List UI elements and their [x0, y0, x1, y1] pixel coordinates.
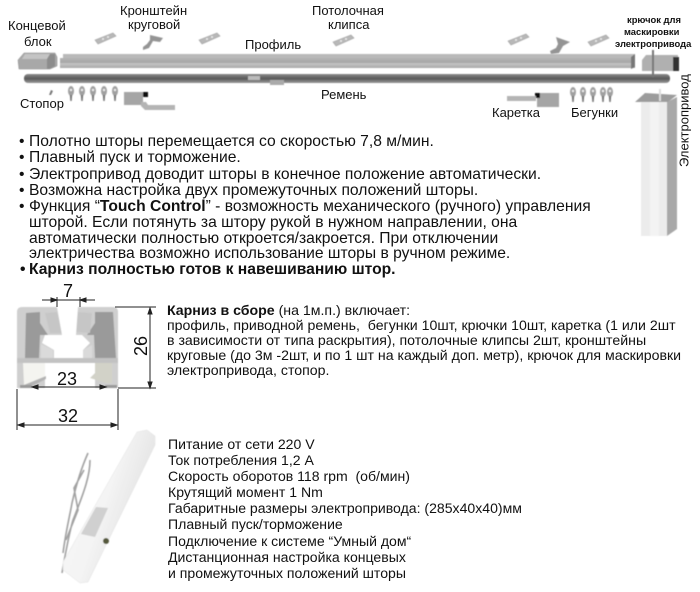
- feature list: Плавный пуск и торможение.: [29, 149, 241, 166]
- assembly kit text: [167, 302, 681, 378]
- feature list: шторой. Если потянуть за штору рукой в нужном направлении, она: [29, 214, 517, 231]
- stopper: [49, 90, 53, 95]
- assembly kit text: электропривода, стопор.: [167, 362, 329, 378]
- motor specifications: Габаритные размеры электропривода: (285x40x40)мм: [168, 500, 522, 516]
- assembly kit text: профиль, приводной ремень, бегунки 10шт, крючки 10шт, каретка (1 или 2шт: [167, 317, 676, 333]
- label: carriage: Каретка: [492, 105, 541, 120]
- runners left: [68, 86, 118, 101]
- belt: [24, 74, 670, 85]
- feature list: [19, 133, 591, 278]
- label: hook: крючок для: [627, 14, 681, 25]
- end block left: [18, 53, 57, 69]
- dimension: 23: 23: [57, 369, 77, 389]
- label: stopper: Стопор: [20, 96, 64, 111]
- label: motor: Электропривод: [676, 74, 692, 167]
- assembly kit text: Карниз в сборе (на 1м.п.) включает:: [167, 302, 410, 318]
- carriage left: [124, 92, 175, 110]
- end block right with hook: [642, 50, 679, 77]
- motor specifications: и промежуточных положений шторы: [168, 565, 406, 581]
- label: runners: Бегунки: [571, 105, 618, 120]
- label: hook: маскировки: [624, 26, 680, 37]
- assembly kit text: круговые (до 3м -2шт, и по 1 шт на каждый доп. метр), крючок для маскировки: [167, 347, 681, 363]
- motor cover: [635, 89, 677, 236]
- motor specifications: Крутящий момент 1 Nm: [168, 484, 323, 500]
- assembly kit text: в зависимости от типа раскрытия), потолочные клипсы 2шт, кронштейны: [167, 332, 646, 348]
- motor specifications: [168, 436, 522, 581]
- label: hook: [615, 14, 692, 49]
- motor specifications: Питание от сети 220 V: [168, 436, 315, 452]
- motor specifications: Скорость оборотов 118 rpm (об/мин): [168, 468, 410, 484]
- ceiling clips: [95, 33, 609, 46]
- motor specifications: Дистанционная настройка концевых: [168, 549, 406, 565]
- feature list: •: [19, 182, 24, 199]
- feature list: Полотно шторы перемещается со скоростью 7,8 м/мин.: [29, 133, 434, 150]
- runners right: [570, 87, 613, 102]
- dimension: 7: 7: [63, 281, 73, 301]
- feature list: •: [19, 133, 24, 150]
- feature list: •: [19, 166, 24, 183]
- feature list: Электропривод доводит шторы в конечное положение автоматически.: [29, 166, 541, 183]
- feature list: •: [19, 149, 24, 166]
- rail kit diagram: клипса: [328, 17, 370, 32]
- dimension: 32: 32: [58, 406, 78, 426]
- round bracket right: [550, 37, 570, 54]
- motor specifications: Ток потребления 1,2 А: [168, 452, 314, 468]
- label: end block: Концевой: [8, 18, 66, 33]
- feature list: •: [19, 198, 24, 215]
- rail kit diagram: блок: [24, 34, 52, 49]
- rail kit diagram: круговой: [128, 17, 180, 32]
- feature list: автоматически полностью откроется/закроется. При отключении: [29, 230, 498, 247]
- label: hook: электропривода: [615, 38, 692, 49]
- motor body: [63, 430, 155, 583]
- feature list: •: [20, 261, 25, 278]
- button: [103, 538, 109, 544]
- motor specifications: Плавный пуск/торможение: [168, 516, 343, 532]
- feature list: Функция “Touch Control” - возможность механического (ручного) управления: [29, 198, 591, 215]
- dimension lines: [17, 297, 156, 430]
- label: round bracket: Кронштейн: [120, 3, 187, 18]
- rail kit diagram: [8, 3, 692, 236]
- profile rail: [60, 54, 635, 69]
- dimension: 26: 26: [131, 336, 151, 356]
- tubular motor photo: [62, 430, 155, 583]
- motor specifications: Подключение к системе “Умный дом“: [168, 533, 412, 549]
- power cable: [62, 453, 90, 573]
- feature list: электричества возможно использование шторы в ручном режиме.: [29, 245, 510, 262]
- label: ceiling clip: Потолочная: [312, 3, 384, 18]
- round bracket left: [143, 35, 163, 50]
- label: belt: Ремень: [321, 87, 367, 102]
- feature list: Возможна настройка двух промежуточных положений шторы.: [29, 182, 478, 199]
- feature list: Карниз полностью готов к навешиванию штор.: [29, 261, 396, 278]
- motor label: [81, 507, 108, 537]
- carriage right: [507, 93, 559, 107]
- profile cross-section with dimensions: [17, 281, 156, 430]
- label: profile: Профиль: [245, 37, 301, 52]
